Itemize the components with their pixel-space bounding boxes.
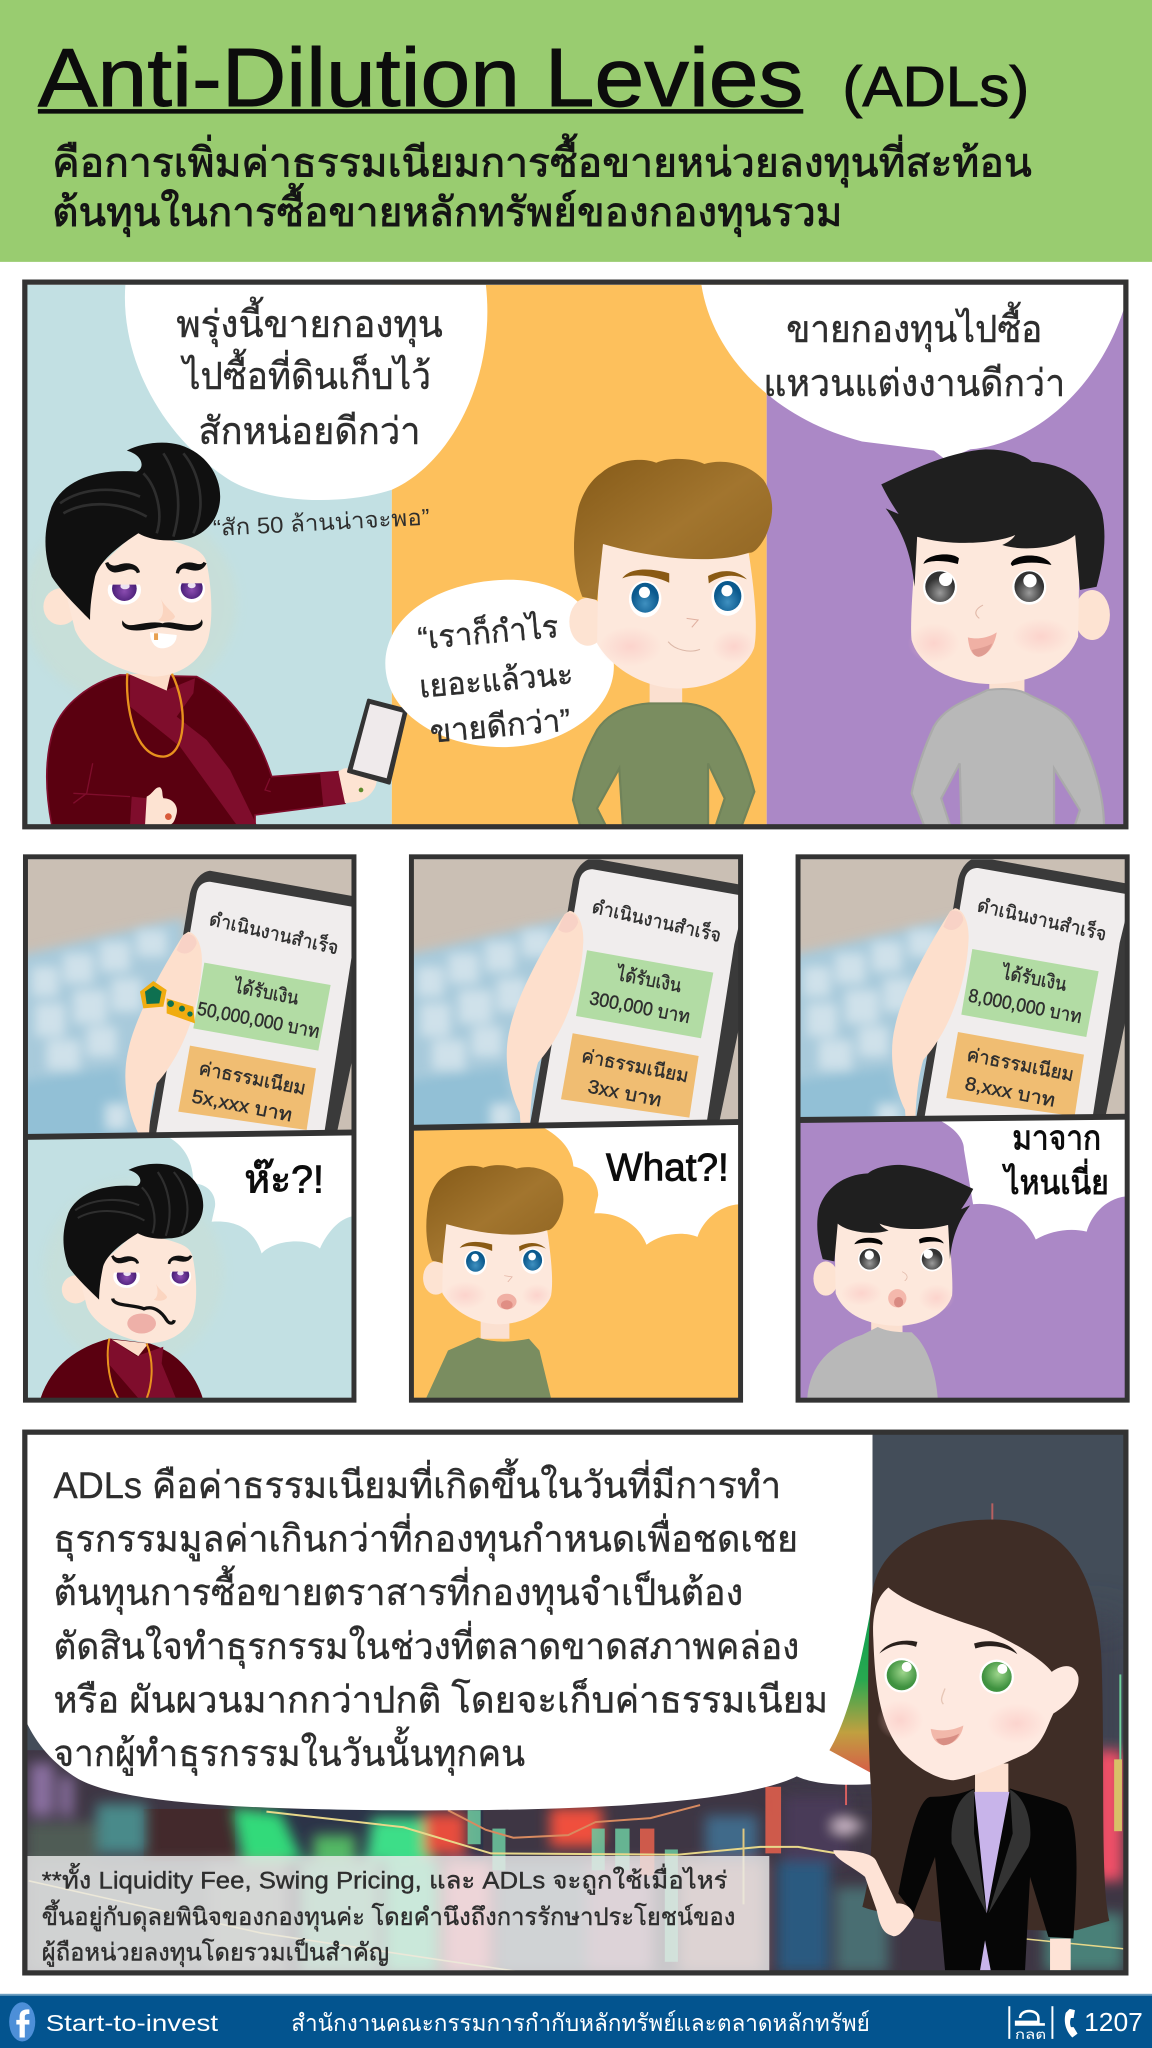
- speech bubble: profit is enough: “เราก็กำไร: [416, 607, 560, 656]
- footnote box: ขึ้นอยู่กับดุลยพินิจของกองทุนค่ะ โดยคำนึงถึงการรักษาประโยชน์ของ: [42, 1899, 735, 1932]
- speech bubble: buy land: [125, 285, 487, 500]
- panel: man 1 phone and reaction: [23, 854, 356, 1403]
- man 3 reaction: [807, 1165, 973, 1399]
- man 2 reaction: [423, 1165, 563, 1399]
- title: Anti-Dilution Levies: Anti-Dilution Levies: [38, 33, 803, 124]
- speech bubble: buy wedding ring: [701, 285, 1125, 460]
- phone screen: [916, 860, 1125, 1116]
- thought note: 50 million: “สัก 50 ล้านน่าจะพอ”: [212, 504, 430, 541]
- subtitle: [52, 133, 1032, 237]
- finger: [892, 908, 969, 1116]
- speech bubble: profit is enough: ขายดีกว่า”: [428, 702, 572, 750]
- phone screen: [528, 858, 746, 1138]
- logo: SEC: กลต: [1015, 2027, 1046, 2042]
- finger with ring: [125, 932, 202, 1132]
- subtitle: ต้นทุนในการซื้อขายหลักทรัพย์ของกองทุนรวม: [52, 183, 842, 237]
- footnote box: **ทั้ง Liquidity Fee, Swing Pricing, และ ADLs จะถูกใช้เมื่อไหร่: [42, 1863, 728, 1896]
- speech bubble: buy land: สักหน่อยดีกว่า: [199, 411, 421, 453]
- footnote box: ผู้ถือหน่วยลงทุนโดยรวมเป็นสำคัญ: [42, 1936, 389, 1967]
- finger: [507, 911, 583, 1146]
- phone screen: ดำเนินงานสำเร็จ: [207, 906, 341, 959]
- phone screen: ดำเนินงานสำเร็จ: [975, 893, 1109, 946]
- header band: [0, 0, 1152, 262]
- speech bubble: buy land: ไปซื้อที่ดินเก็บไว้: [180, 348, 431, 398]
- phone screen: 300,000 บาท: [588, 988, 692, 1028]
- speech bubble: profit is enough: [385, 580, 614, 750]
- footer bar: [0, 1994, 1152, 2048]
- footer page name: Start-to-invest: [46, 2010, 219, 2036]
- reaction text: มาจาก: [1012, 1119, 1101, 1157]
- phone screen: ได้รับเงิน: [999, 962, 1069, 996]
- reaction text: [1002, 1119, 1109, 1202]
- phone screen: 50,000,000 บาท: [195, 999, 321, 1043]
- subtitle: คือการเพิ่มค่าธรรมเนียมการซื้อขายหน่วยลงทุนที่สะท้อน: [52, 133, 1032, 187]
- character: woman presenter: [833, 1520, 1109, 1970]
- burst bubble: [942, 1120, 1125, 1240]
- footnote box: [27, 1856, 769, 1971]
- character: wealthy man with phone: [23, 443, 407, 825]
- reaction text: ไหนเนี่ย: [1002, 1159, 1109, 1202]
- phone screen: 5x,xxx บาท: [190, 1086, 294, 1126]
- phone in hand: [348, 700, 407, 783]
- phone screen: [149, 870, 352, 1132]
- line 2: ธุรกรรมมูลค่าเกินกว่าที่กองทุนกำหนดเพื่อชดเชย: [54, 1513, 798, 1562]
- burst bubble and reacting man 1: [40, 1130, 355, 1400]
- speech bubble: profit is enough: เยอะแล้วนะ: [418, 656, 575, 705]
- panel: man 2 phone and reaction: [392, 850, 762, 1401]
- footer organisation name: สำนักงานคณะกรรมการกำกับหลักทรัพย์และตลาดหลักทรัพย์: [291, 2010, 870, 2036]
- speech bubble: buy wedding ring: แหวนแต่งงานดีกว่า: [763, 363, 1065, 405]
- mustache and grin: [123, 621, 202, 648]
- hotline number: 1207: [1084, 2007, 1143, 2037]
- panel: ADLs explanation: [0, 1432, 1152, 1998]
- character: black-haired man: [881, 449, 1110, 827]
- icon: phone: [1065, 2009, 1078, 2038]
- phone screen: ค่าธรรมเนียม: [197, 1058, 308, 1100]
- speech bubble: buy wedding ring: ขายกองทุนไปซื้อ: [786, 301, 1042, 352]
- reaction text: What?!: [606, 1147, 729, 1190]
- phone screen: 8,xxx บาท: [963, 1074, 1057, 1112]
- line 6: จากผู้ทำธุรกรรมในวันนั้นทุกคน: [54, 1726, 525, 1776]
- line 4: ตัดสินใจทำธุรกรรมในช่วงที่ตลาดขาดสภาพคล่อง: [54, 1620, 799, 1669]
- presenting hand: [833, 1850, 914, 1936]
- icon: facebook: [9, 2002, 35, 2041]
- phone screen: ค่าธรรมเนียม: [580, 1045, 690, 1087]
- line 1: ADLs คือค่าธรรมเนียมที่เกิดขึ้นในวันที่มีการทำ: [54, 1458, 781, 1506]
- speech bubble: buy land: พรุ่งนี้ขายกองทุน: [176, 296, 443, 347]
- phone screen: 8,000,000 บาท: [967, 986, 1083, 1028]
- character: brown-haired man: [569, 459, 772, 827]
- speech bubble: definition: [26, 1434, 872, 1810]
- burst bubble: [544, 1124, 738, 1245]
- panel: man 3 phone and reaction: [779, 850, 1149, 1401]
- phone screen: ได้รับเงิน: [231, 975, 301, 1010]
- phone screen: 3xx บาท: [586, 1077, 663, 1111]
- line 5: หรือ ผันผวนมากกว่าปกติ โดยจะเก็บค่าธรรมเนียม: [54, 1676, 828, 1720]
- line 3: ต้นทุนการซื้อขายตราสารที่กองทุนจำเป็นต้อง: [54, 1565, 743, 1615]
- market chart background: [0, 1503, 1152, 1998]
- phone screen: ได้รับเงิน: [613, 963, 683, 997]
- phone screen: ค่าธรรมเนียม: [965, 1044, 1076, 1086]
- panel: three investors planning to sell: [23, 282, 1126, 827]
- reaction text: ห๊ะ?!: [244, 1158, 324, 1201]
- title abbreviation: (ADLs): [842, 55, 1029, 118]
- logo: SEC: [1008, 2006, 1053, 2042]
- phone screen: ดำเนินงานสำเร็จ: [590, 894, 724, 947]
